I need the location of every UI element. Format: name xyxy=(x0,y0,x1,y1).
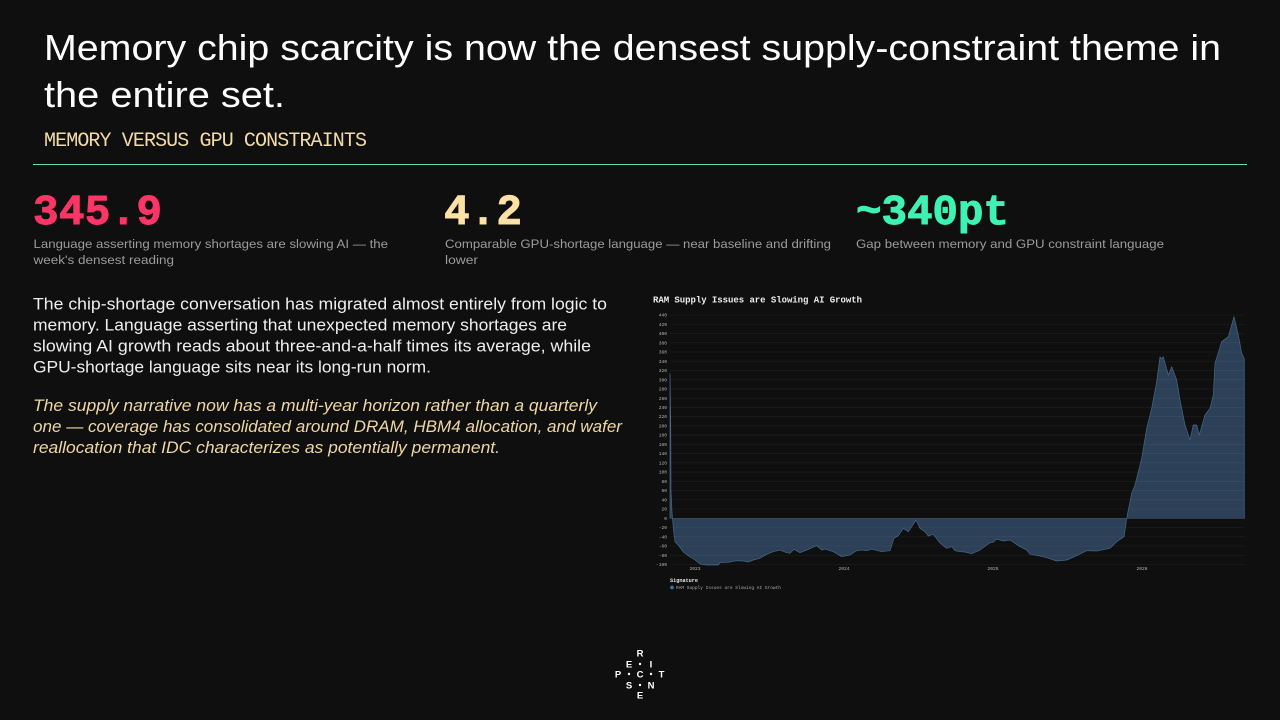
y axis labels: 60 xyxy=(661,488,667,494)
x axis labels: 2025 xyxy=(987,566,999,572)
x axis labels xyxy=(689,566,1148,572)
y axis labels: 280 xyxy=(659,386,667,392)
legend: Signature xyxy=(670,578,698,584)
y axis labels: 420 xyxy=(659,322,667,328)
logo: compass mark: R xyxy=(637,648,644,660)
legend: RAM Supply Issues are Slowing AI Growth xyxy=(676,585,781,591)
y axis labels: 400 xyxy=(659,331,667,337)
italic takeaway: reallocation that IDC characterizes as potentially permanent. xyxy=(33,438,500,457)
stat: memory shortage reading: week's densest reading xyxy=(32,253,174,267)
y axis labels: 120 xyxy=(659,460,667,466)
y axis labels: 260 xyxy=(659,396,667,402)
gridlines xyxy=(670,315,1245,564)
logo: compass mark: I xyxy=(650,660,652,670)
stat: GPU shortage reading xyxy=(444,188,831,267)
stat: gap between memory and GPU: Gap between memory and GPU constraint language xyxy=(856,237,1164,251)
y axis labels: 220 xyxy=(659,414,667,420)
logo: compass mark: E xyxy=(626,660,632,670)
y axis labels: -80 xyxy=(659,553,667,559)
stat: GPU shortage reading: 4.2 xyxy=(444,188,522,237)
italic takeaway: The supply narrative now has a multi-year horizon rather than a quarterly xyxy=(33,396,599,415)
y axis labels: 180 xyxy=(659,433,667,439)
y axis labels: 100 xyxy=(659,470,667,476)
y axis labels: 0 xyxy=(664,516,667,522)
chart title: RAM Supply Issues are Slowing AI Growth xyxy=(653,296,862,306)
logo: compass mark: N xyxy=(648,680,655,692)
y axis labels: 440 xyxy=(659,313,667,319)
y axis labels: -100 xyxy=(656,562,667,568)
y axis labels: 380 xyxy=(659,340,667,346)
subtitle: MEMORY VERSUS GPU CONSTRAINTS xyxy=(44,130,367,153)
stat: GPU shortage reading: lower xyxy=(445,253,478,267)
y axis labels: -60 xyxy=(659,544,667,550)
y axis labels: 200 xyxy=(659,424,667,430)
y axis labels: -40 xyxy=(659,534,667,540)
body paragraph: memory. Language asserting that unexpected memory shortages are xyxy=(33,316,567,334)
x axis labels: 2023 xyxy=(689,566,701,572)
y axis labels: 140 xyxy=(659,451,667,457)
x axis labels: 2026 xyxy=(1136,566,1148,572)
stat: gap between memory and GPU xyxy=(856,188,1164,251)
logo: compass mark: E xyxy=(637,690,643,702)
body paragraph: GPU-shortage language sits near its long-run norm. xyxy=(33,358,431,376)
y axis labels: 360 xyxy=(659,350,667,356)
italic takeaway: one — coverage has consolidated around DRAM, HBM4 allocation, and wafer xyxy=(33,417,624,436)
y axis labels xyxy=(656,313,667,568)
logo: compass mark xyxy=(615,648,665,702)
title xyxy=(44,27,1221,115)
logo: compass mark: S xyxy=(626,680,632,692)
body paragraph: The chip-shortage conversation has migrated almost entirely from logic to xyxy=(33,294,607,314)
title: the entire set. xyxy=(44,74,285,115)
body paragraph xyxy=(33,294,607,376)
stat: memory shortage reading: 345.9 xyxy=(33,188,162,237)
y axis labels: 300 xyxy=(659,377,667,383)
y axis labels: 80 xyxy=(661,479,667,485)
x axis labels: 2024 xyxy=(838,566,850,572)
logo: compass mark: T xyxy=(659,670,665,680)
logo: compass mark: C xyxy=(637,670,644,680)
stat: memory shortage reading: Language asserting memory shortages are slowing AI — the xyxy=(34,237,388,251)
title: Memory chip scarcity is now the densest supply-constraint theme in xyxy=(44,27,1221,68)
y axis labels: 320 xyxy=(659,368,667,374)
logo: compass mark: P xyxy=(615,670,622,680)
y axis labels: 20 xyxy=(661,507,667,513)
area series xyxy=(670,317,1244,565)
y axis labels: 160 xyxy=(659,442,667,448)
italic takeaway xyxy=(33,396,624,457)
stat: GPU shortage reading: Comparable GPU-shortage language — near baseline and drifting xyxy=(445,237,831,251)
chart: RAM supply issues xyxy=(653,296,1245,591)
y axis labels: 240 xyxy=(659,405,667,411)
legend xyxy=(670,578,781,591)
body paragraph: slowing AI growth reads about three-and-a-half times its average, while xyxy=(33,336,591,356)
stat: memory shortage reading xyxy=(32,188,388,267)
y axis labels: 340 xyxy=(659,359,667,365)
stat: gap between memory and GPU: ~340pt xyxy=(856,188,1009,237)
y axis labels: -20 xyxy=(659,525,667,531)
y axis labels: 40 xyxy=(661,497,667,503)
